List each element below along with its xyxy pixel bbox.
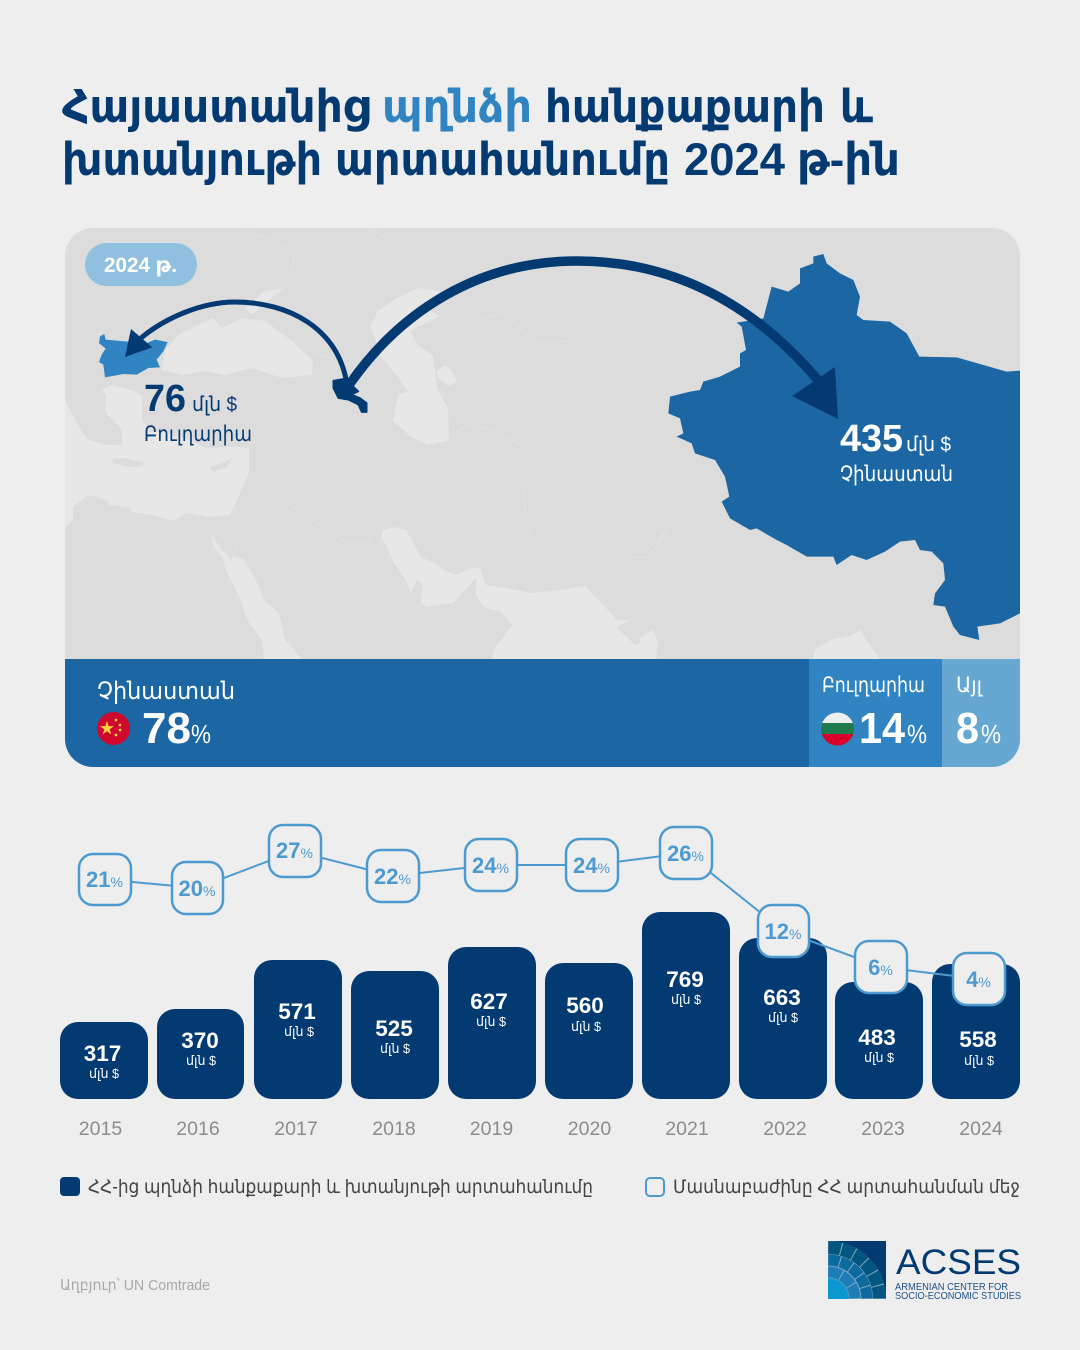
- year badge: 2024 թ.: [104, 254, 177, 277]
- title line 1: հանքաքարի: [545, 81, 825, 132]
- label: China value: [840, 418, 953, 486]
- logo subtitle: SOCIO-ECONOMIC STUDIES: [895, 1290, 1021, 1302]
- year labels: 2016: [176, 1118, 220, 1140]
- bars: [60, 912, 1020, 1099]
- year labels: 2015: [79, 1118, 122, 1140]
- bar values: մլն $: [964, 1053, 995, 1068]
- map seas: [65, 288, 880, 659]
- bar values: 317: [84, 1041, 121, 1066]
- infographic page: [60, 88, 1021, 1299]
- year labels: 2019: [470, 1118, 513, 1140]
- bar values: 558: [959, 1027, 997, 1052]
- title line 2: արտահանումը: [335, 134, 670, 185]
- bar values: մլն $: [571, 1019, 602, 1034]
- share values: 22%: [374, 864, 411, 889]
- label: Bulgaria value: [144, 378, 252, 446]
- bar values: [84, 967, 997, 1081]
- title: [62, 81, 900, 185]
- bar values: մլն $: [768, 1010, 799, 1025]
- label: China value: 435: [840, 418, 903, 460]
- share: China 78%: %: [191, 719, 211, 749]
- logo: ACSES: [828, 1241, 1021, 1299]
- year labels: 2023: [861, 1118, 905, 1140]
- bar values: մլն $: [476, 1014, 507, 1029]
- share: Bulgaria 14%: Բուլղարիա: [822, 674, 925, 697]
- share boxes: [79, 825, 1005, 1005]
- year labels: 2022: [763, 1118, 807, 1140]
- share values: 21%: [86, 867, 123, 892]
- legend: share: Մասնաբաժինը ՀՀ արտահանման մեջ: [673, 1177, 1020, 1198]
- title line 1: պղնձի: [382, 81, 532, 132]
- share values: 24%: [472, 853, 509, 878]
- share: Bulgaria 14%: [809, 659, 942, 767]
- share: China 78%: 78: [142, 704, 191, 753]
- share: China 78%: [65, 659, 809, 767]
- title line 2: 2024: [684, 134, 785, 185]
- title line 2: [62, 134, 900, 185]
- logo subtitle: [895, 1281, 1021, 1302]
- year labels: 2018: [372, 1118, 416, 1140]
- title line 2: խտանյութի: [62, 134, 322, 185]
- bar values: 560: [566, 993, 604, 1018]
- share values: 20%: [179, 876, 215, 901]
- title line 1: և: [840, 81, 873, 132]
- share trend line: [105, 851, 979, 979]
- arrow: Armenia to China: [347, 261, 838, 419]
- share: Bulgaria 14%: 14: [859, 704, 905, 753]
- share values: [86, 838, 991, 992]
- bar values: 769: [666, 967, 704, 992]
- year badge: [85, 243, 197, 286]
- legend: exports: ՀՀ-ից պղնձի հանքաքարի և խտանյութի արտահանումը: [88, 1177, 593, 1198]
- map: Armenia: [333, 379, 367, 412]
- logo subtitle: ARMENIAN CENTER FOR: [895, 1281, 1008, 1293]
- bar values: 663: [763, 985, 801, 1010]
- arrow: Armenia to Bulgaria: [125, 302, 347, 385]
- map background land: [65, 228, 1020, 767]
- share values: 6%: [868, 955, 893, 980]
- map: Bulgaria: [99, 334, 168, 377]
- label: China value: Չինաստան: [840, 463, 953, 486]
- bar values: մլն $: [284, 1024, 315, 1039]
- share: other 8%: Այլ: [956, 674, 983, 697]
- legend: [60, 1177, 1020, 1198]
- bar values: մլն $: [380, 1041, 411, 1056]
- title line 2: թ-ին: [797, 134, 900, 185]
- label: China value: մլն $: [906, 434, 951, 456]
- label: Bulgaria value: մլն $: [192, 394, 237, 416]
- share values: 12%: [765, 919, 801, 944]
- title line 1: Հայաստանից: [62, 81, 370, 132]
- share: other 8%: [942, 659, 1020, 767]
- bar values: 483: [858, 1025, 896, 1050]
- bar values: մլն $: [89, 1066, 120, 1081]
- share: China 78%: Չինաստան: [97, 678, 235, 705]
- panel: export map: [65, 228, 1020, 767]
- bar values: մլն $: [186, 1053, 217, 1068]
- bar values: 571: [278, 999, 316, 1024]
- bar values: 627: [470, 989, 508, 1014]
- logo wordmark: ACSES: [896, 1243, 1021, 1282]
- share values: 24%: [573, 853, 610, 878]
- source note: Աղբյուր՝ UN Comtrade: [60, 1277, 210, 1294]
- share values: 27%: [276, 838, 313, 863]
- share: other 8%: %: [981, 719, 1001, 749]
- share: Bulgaria 14%: %: [907, 719, 927, 749]
- year labels: 2021: [665, 1118, 709, 1140]
- year labels: 2024: [959, 1118, 1003, 1140]
- map: China region: [668, 254, 1020, 640]
- chart: exports by year: [60, 825, 1020, 1140]
- share: other 8%: 8: [956, 704, 979, 753]
- bar values: մլն $: [671, 992, 702, 1007]
- title line 1: [62, 81, 873, 132]
- bar values: 370: [181, 1028, 219, 1053]
- year labels: [79, 1118, 1003, 1140]
- logo mark: [828, 1241, 886, 1299]
- map islands and faint borders: [112, 458, 232, 472]
- year labels: 2020: [568, 1118, 611, 1140]
- label: Bulgaria value: Բուլղարիա: [144, 423, 252, 446]
- share values: 4%: [966, 967, 991, 992]
- share bar: [65, 659, 1020, 767]
- year labels: 2017: [274, 1118, 318, 1140]
- bar values: մլն $: [864, 1050, 895, 1065]
- label: Bulgaria value: 76: [144, 378, 186, 420]
- bar values: 525: [375, 1016, 413, 1041]
- share values: 26%: [667, 841, 704, 866]
